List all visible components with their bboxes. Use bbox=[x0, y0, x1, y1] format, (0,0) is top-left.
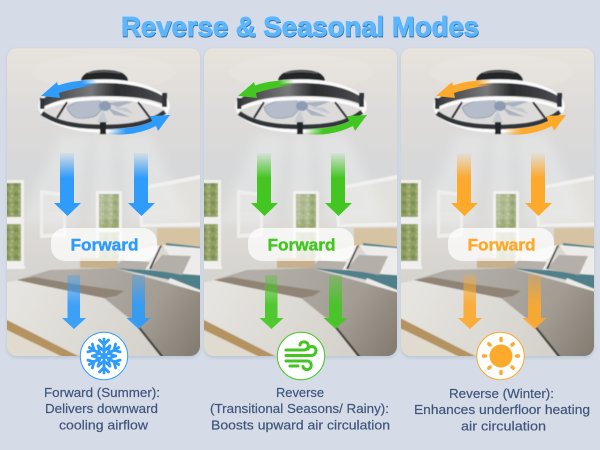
caption: reverse transitional bbox=[210, 385, 390, 432]
title: Reverse & Seasonal Modes bbox=[122, 12, 480, 43]
arrow: upper right bbox=[325, 153, 352, 216]
title: Reverse & Seasonal Modes bbox=[121, 11, 479, 42]
arrow: lower right bbox=[126, 275, 150, 329]
rotation arrow: top bbox=[238, 80, 294, 98]
caption: reverse winter: Reverse (Winter): bbox=[449, 386, 554, 401]
label pill bbox=[248, 228, 354, 261]
arrow: lower right bbox=[522, 275, 546, 329]
label: Forward: Forward bbox=[70, 236, 138, 254]
caption: forward summer bbox=[44, 385, 160, 432]
icon: wind bbox=[277, 332, 325, 380]
arrow: upper left bbox=[451, 153, 478, 216]
arrow: lower right bbox=[324, 275, 348, 329]
caption: reverse transitional: Boosts upward air circulation bbox=[211, 418, 390, 432]
label pill bbox=[51, 228, 157, 261]
rotation arrow: bottom bbox=[305, 115, 367, 135]
label: Forward: Forward bbox=[468, 236, 536, 254]
caption: forward summer: Forward (Summer): bbox=[44, 385, 160, 400]
room photo with ceiling fan bbox=[204, 48, 397, 356]
caption: reverse winter: air circulation bbox=[461, 418, 546, 434]
arrow: lower left bbox=[62, 275, 86, 329]
caption: forward summer: cooling airflow bbox=[59, 418, 149, 432]
arrow: lower left bbox=[260, 275, 284, 329]
arrow: lower left bbox=[458, 275, 482, 329]
rotation arrow: bottom bbox=[504, 115, 566, 135]
caption: forward summer: Delivers downward bbox=[45, 401, 158, 416]
panel: reverse winter bbox=[392, 48, 600, 360]
caption: reverse winter: Enhances underfloor heating bbox=[414, 402, 590, 417]
panel: reverse transitional bbox=[204, 48, 398, 358]
room photo with ceiling fan bbox=[392, 48, 600, 360]
rotation arrow: top bbox=[436, 80, 492, 98]
caption: reverse transitional: (Transitional Seasons/ Rainy): bbox=[210, 401, 389, 416]
label pill bbox=[448, 228, 554, 261]
room photo with ceiling fan bbox=[0, 48, 210, 360]
icon: snowflake bbox=[80, 332, 128, 380]
caption: reverse winter bbox=[414, 386, 590, 434]
arrow: upper left bbox=[54, 153, 81, 216]
arrow: upper left bbox=[251, 153, 278, 216]
label: Forward: Forward bbox=[268, 236, 336, 254]
caption: reverse transitional: Reverse bbox=[276, 385, 324, 400]
rotation arrow: bottom bbox=[108, 115, 170, 135]
arrow: upper right bbox=[128, 153, 155, 216]
panel: forward summer bbox=[0, 48, 210, 360]
rotation arrow: top bbox=[41, 80, 97, 98]
icon: sun bbox=[477, 332, 524, 380]
arrow: upper right bbox=[525, 153, 552, 216]
